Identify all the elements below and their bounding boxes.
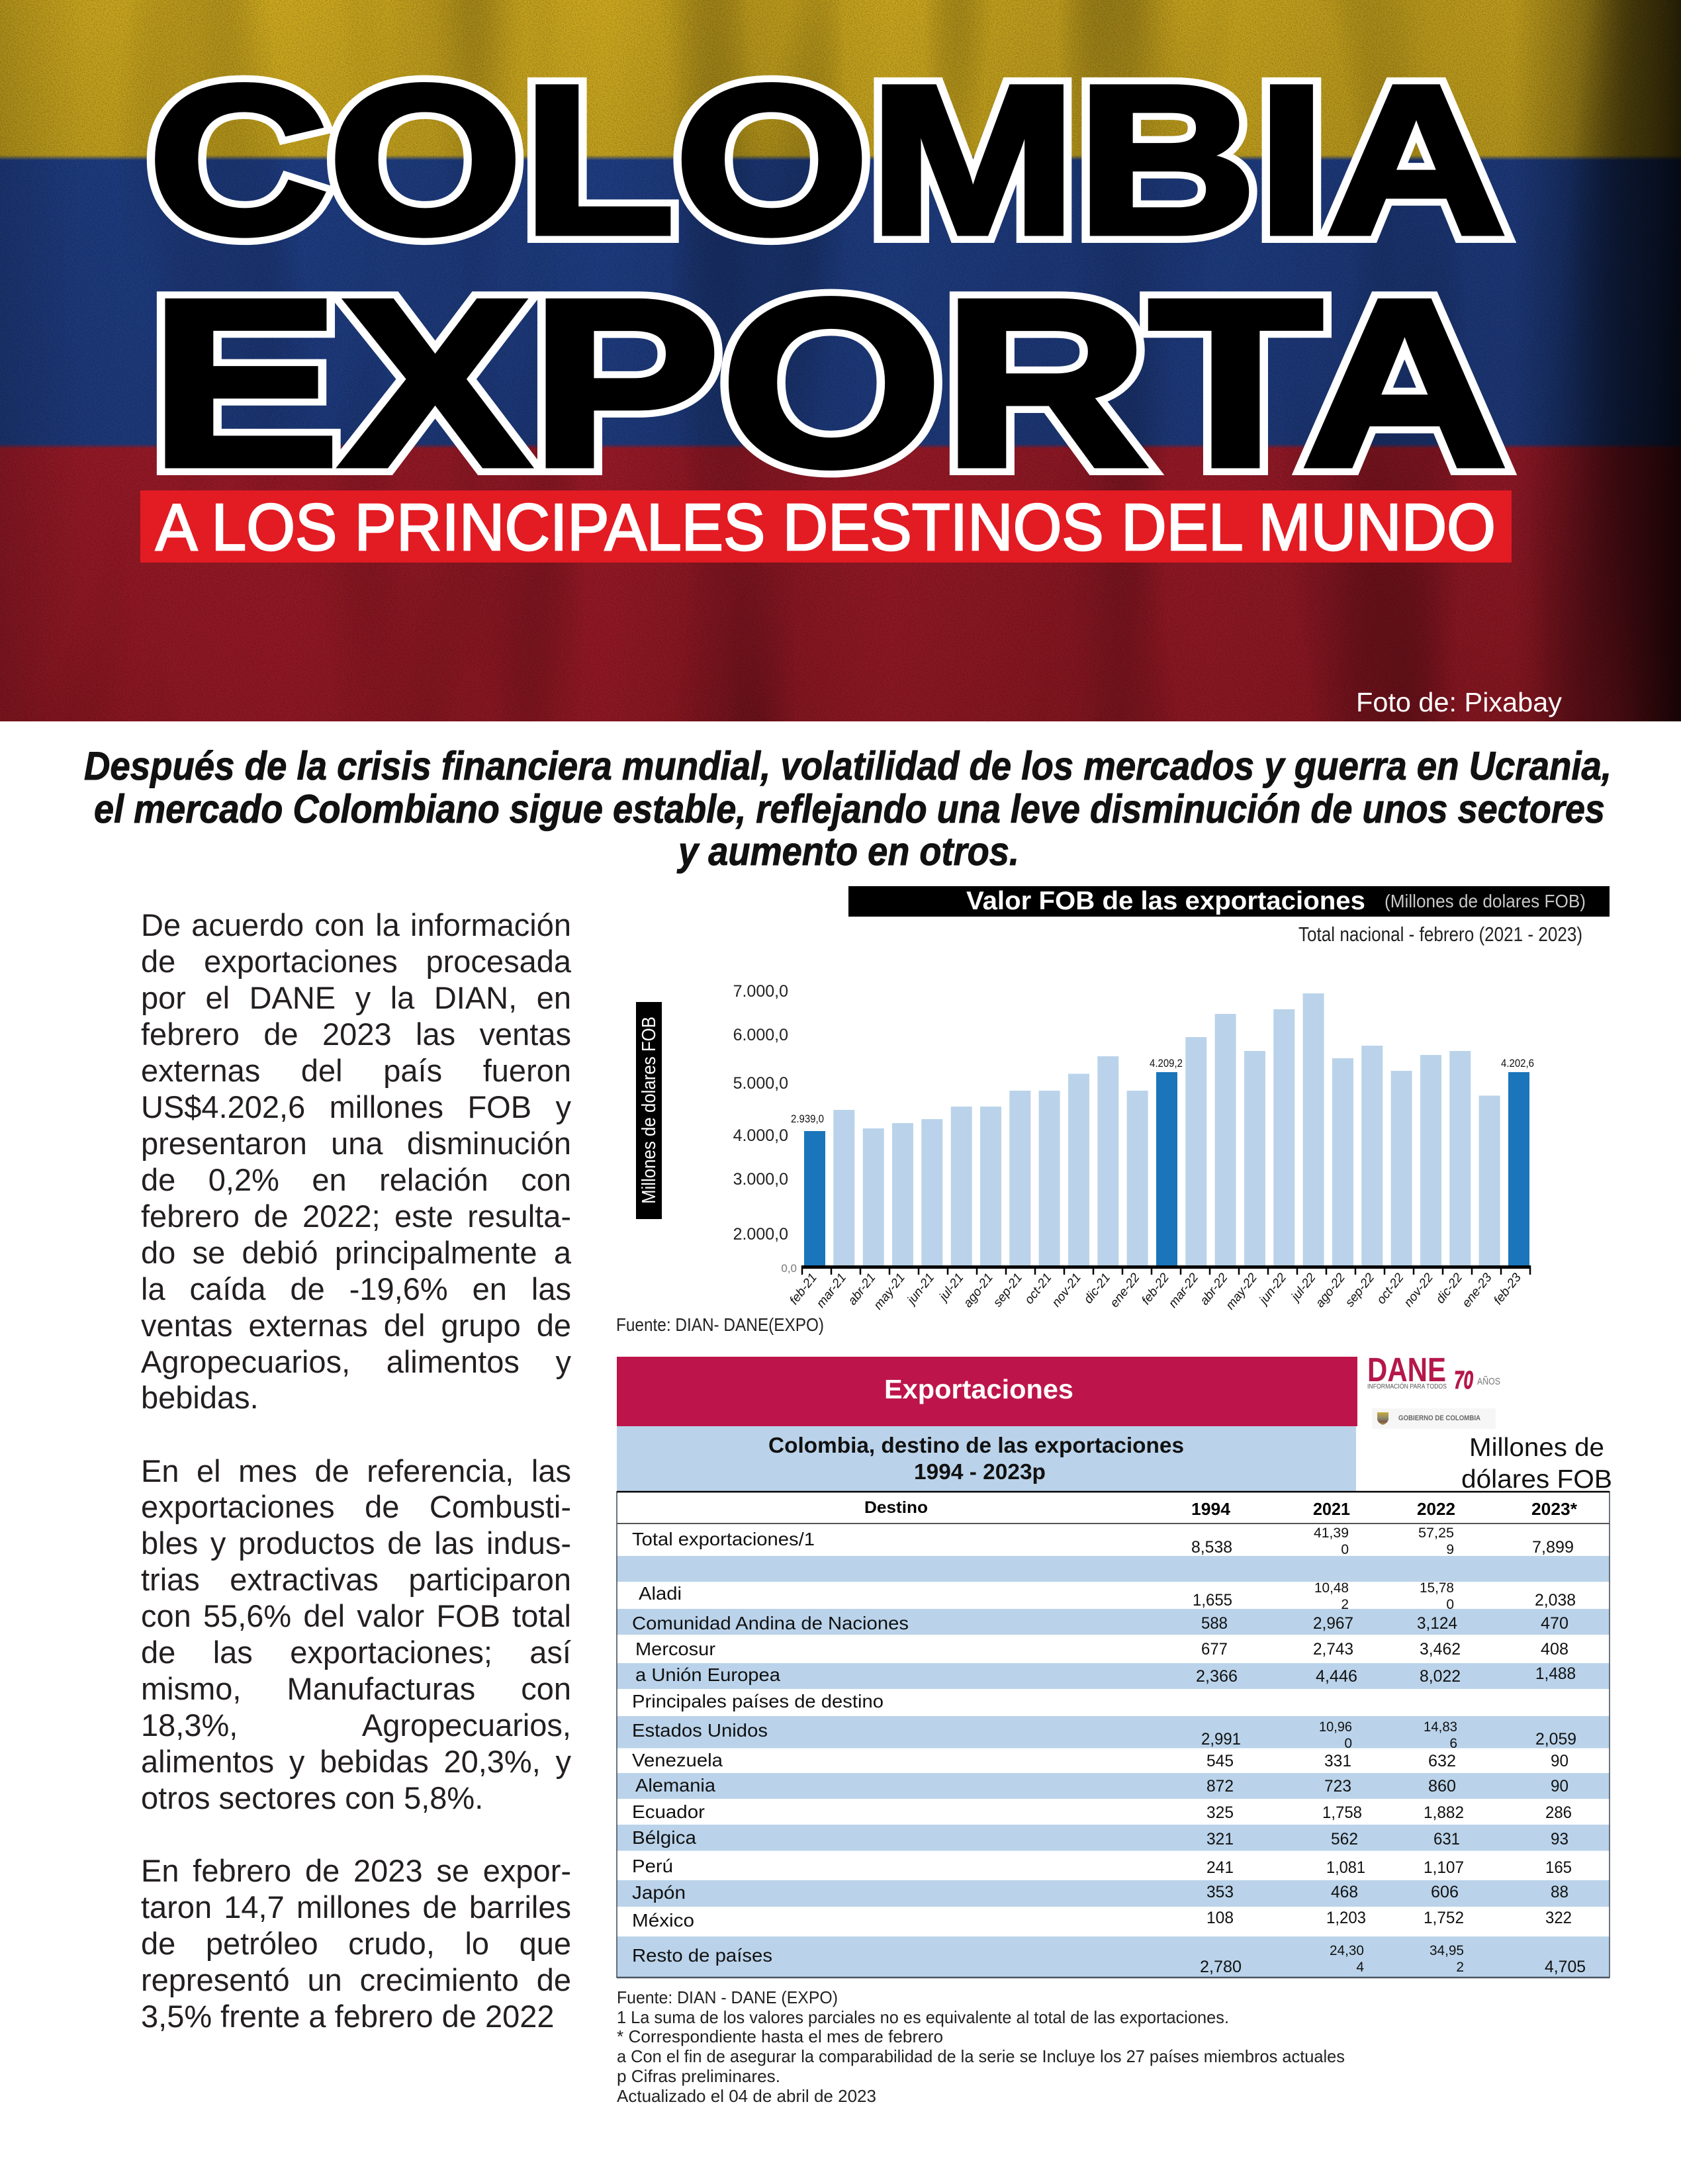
row: Mercosur: 2,743 (1313, 1640, 1353, 1659)
title: COLOMBIA EXPORTA: EXPORTA (150, 250, 1508, 516)
body text: third paragraph: taron 14,7 millones de barriles (141, 1889, 571, 1925)
row: Aladi: 2,038 (1535, 1591, 1576, 1610)
row: Aladi: 1,655 (1193, 1591, 1232, 1610)
hero: Colombian flag background photo (0, 0, 1681, 721)
x axis month labels: sep-22 (1343, 1271, 1377, 1310)
row: Japón: Japón (632, 1882, 686, 1903)
row: Ecuador (632, 1801, 1572, 1822)
table title: destino de las exportaciones: 1994 - 2023p (914, 1459, 1046, 1484)
row: Mercosur (635, 1639, 1568, 1659)
row: Venezuela: 545 (1206, 1752, 1234, 1770)
row: Venezuela (632, 1750, 1568, 1770)
body text: second paragraph (141, 1453, 571, 1815)
row: Aladi: 15,78 (1420, 1580, 1454, 1596)
row: Perú: 165 (1545, 1858, 1572, 1877)
row: Alemania: 872 (1206, 1777, 1234, 1796)
body text: third paragraph: En febrero de 2023 se expor- (141, 1853, 571, 1888)
row: Mercosur: Mercosur (635, 1639, 715, 1659)
row: Total exportaciones: 8,538 (1191, 1538, 1232, 1557)
row: Comunidad Andina de Naciones: 2,967 (1313, 1614, 1353, 1633)
row: Alemania: Alemania (635, 1775, 715, 1796)
logo: Gobierno de Colombia: GOBIERNO DE COLOMBIA (1398, 1414, 1480, 1422)
table units note: dólares FOB (1461, 1465, 1612, 1494)
x axis month labels: may-22 (1223, 1271, 1260, 1312)
table header row: Destino (864, 1498, 928, 1517)
body text: first paragraph: De acuerdo con la información (141, 907, 571, 942)
table header row: 1994 (1191, 1499, 1231, 1519)
data labels: 2.939,0 (791, 1113, 824, 1125)
row: Estados Unidos: 2,059 (1535, 1730, 1576, 1749)
x axis month labels: ago-22 (1313, 1271, 1348, 1310)
y axis labels: 5.000,0 (733, 1074, 788, 1093)
body text: second paragraph: bles y productos de las indus- (141, 1525, 571, 1561)
row: México: 108 (1206, 1909, 1234, 1927)
body text: first paragraph: de exportaciones procesada (141, 944, 571, 979)
body text: second paragraph: trias extractivas participaron (141, 1562, 571, 1597)
row: Aladi: Aladi (639, 1583, 682, 1604)
title: COLOMBIA EXPORTA (148, 41, 1508, 516)
row: Estados Unidos: 0 (1344, 1736, 1352, 1751)
chart source: Fuente: DIAN- DANE(EXPO) (616, 1314, 824, 1335)
row: Resto de países: 2 (1456, 1960, 1464, 1975)
row: Resto de países: 2,780 (1200, 1958, 1242, 1976)
table header row: 2023* (1531, 1499, 1578, 1519)
row: Total exportaciones: 9 (1446, 1542, 1454, 1557)
row: Comunidad Andina de Naciones: Comunidad Andina de Naciones (632, 1613, 909, 1633)
table row stripes (617, 1556, 1610, 1978)
row: Alemania: 90 (1551, 1777, 1568, 1796)
body text: first paragraph: US$4.202,6 millones FOB y (141, 1089, 571, 1124)
body text: second paragraph: mismo, Manufacturas con (141, 1671, 571, 1706)
body text: first paragraph: la caída de -19,6% en las (141, 1271, 571, 1306)
table footnotes: 1 La suma de los valores parciales no es equivalente al total de las exportaciones. (617, 2007, 1229, 2027)
body text: third paragraph: 3,5% frente a febrero de 2022 (141, 1999, 555, 2034)
y axis labels: 6.000,0 (733, 1026, 788, 1044)
row: Resto de países: 34,95 (1430, 1943, 1464, 1958)
row: Comunidad Andina de Naciones (632, 1613, 1568, 1633)
logo: DANE 70 años (1367, 1351, 1500, 1394)
table frame (617, 1492, 1610, 1978)
table footnotes: p Cifras preliminares. (617, 2066, 780, 2086)
x axis month labels: feb-22 (1139, 1271, 1172, 1308)
x axis month labels: ene-22 (1108, 1271, 1143, 1310)
row: Total exportaciones: 7,899 (1532, 1538, 1574, 1557)
body text: third paragraph (141, 1853, 571, 2034)
x axis line and ticks (802, 1265, 1530, 1275)
body text: first paragraph: bebidas. (141, 1380, 259, 1415)
data labels: 4.209,2 (1150, 1057, 1183, 1069)
row: Estados Unidos (632, 1719, 1576, 1751)
row: Mercosur: 677 (1201, 1640, 1228, 1659)
title: COLOMBIA EXPORTA: EXPORTA (150, 250, 1508, 516)
body text: first paragraph: febrero de 2023 las ventas (141, 1017, 571, 1052)
row: Perú: 241 (1206, 1858, 1234, 1877)
table header row (864, 1498, 1578, 1519)
row: Venezuela: Venezuela (632, 1750, 723, 1770)
title: COLOMBIA EXPORTA: COLOMBIA (148, 41, 1506, 278)
y axis title: Millones de dolares FOB (639, 1017, 660, 1204)
x axis month labels: ene-23 (1460, 1271, 1495, 1310)
table title: destino de las exportaciones: Colombia, destino de las exportaciones (768, 1433, 1184, 1457)
logo: DANE 70 años: AÑOS (1477, 1376, 1500, 1387)
row: Mercosur: 3,462 (1420, 1640, 1461, 1659)
row: Aladi: 2 (1341, 1597, 1349, 1612)
chart title bar: (Millones de dolares FOB) (1385, 891, 1586, 911)
body text: second paragraph: alimentos y bebidas 20,3%, y (141, 1744, 571, 1779)
row: Venezuela: 90 (1551, 1752, 1568, 1770)
title: COLOMBIA EXPORTA: COLOMBIA (148, 41, 1506, 278)
x axis month labels: feb-21 (787, 1271, 820, 1308)
x axis month labels: mar-21 (814, 1271, 849, 1310)
table header band: Exportaciones (617, 1357, 1357, 1426)
x axis month labels: abr-22 (1197, 1271, 1231, 1308)
row: Ecuador: 1,758 (1322, 1803, 1362, 1822)
body text: first paragraph: de 0,2% en relación con (141, 1162, 571, 1197)
row: Total exportaciones: 41,39 (1314, 1525, 1349, 1541)
x axis month labels: jul-21 (936, 1271, 967, 1305)
row: Ecuador: 1,882 (1424, 1803, 1464, 1822)
row: Estados Unidos: 10,96 (1319, 1719, 1352, 1735)
row: Total exportaciones (632, 1525, 1574, 1557)
x axis month labels: oct-21 (1022, 1271, 1055, 1307)
data labels: 4.202,6 (1501, 1057, 1534, 1069)
x axis month labels (787, 1271, 1524, 1312)
body text: second paragraph: En el mes de referencia, las (141, 1453, 571, 1488)
row: Total exportaciones: 0 (1341, 1542, 1349, 1557)
row: Perú: Perú (632, 1856, 673, 1876)
y axis labels: 0,0 (781, 1262, 797, 1275)
y axis labels: 4.000,0 (733, 1126, 788, 1145)
table title: destino de las exportaciones (617, 1426, 1356, 1492)
row: Resto de países: Resto de países (632, 1945, 772, 1966)
headline (84, 744, 1612, 874)
body text: first paragraph: do se debió principalmente a (141, 1235, 571, 1270)
row: Japón (632, 1882, 1568, 1903)
headline: y aumento en otros. (676, 829, 1019, 874)
y axis labels: 2.000,0 (733, 1225, 788, 1244)
x axis month labels: nov-21 (1050, 1271, 1084, 1310)
bars (804, 993, 1529, 1265)
x axis month labels: jun-22 (1255, 1271, 1289, 1308)
row: Japón: 468 (1331, 1883, 1358, 1901)
row: México: 1,203 (1326, 1909, 1366, 1927)
row: Ecuador: 325 (1206, 1803, 1234, 1822)
table header row: 2022 (1417, 1499, 1455, 1519)
logo: DANE 70 años: 70 (1454, 1367, 1473, 1394)
row: Ecuador: Ecuador (632, 1801, 705, 1822)
row: Aladi (639, 1580, 1576, 1612)
chart title bar: Valor FOB de las exportaciones (966, 887, 1365, 915)
row: México: 1,752 (1424, 1909, 1464, 1927)
row: Comunidad Andina de Naciones: 588 (1201, 1614, 1228, 1633)
row: Unión Europea: a Unión Europea (635, 1664, 780, 1685)
row: Aladi: 10,48 (1314, 1580, 1349, 1596)
row: Estados Unidos: 14,83 (1424, 1719, 1457, 1735)
row: Japón: 88 (1551, 1883, 1568, 1901)
row: Venezuela: 632 (1428, 1752, 1456, 1770)
body text: first paragraph: Agropecuarios, alimentos y (141, 1344, 571, 1379)
row: Perú: 1,107 (1424, 1858, 1464, 1877)
x axis month labels: sep-21 (991, 1271, 1025, 1310)
row: Unión Europea: 4,446 (1316, 1667, 1357, 1686)
body text: third paragraph: representó un crecimiento de (141, 1962, 571, 1997)
body text: third paragraph: de petróleo crudo, lo que (141, 1926, 571, 1961)
row: Bélgica: 631 (1433, 1830, 1460, 1848)
row: Bélgica: 93 (1551, 1830, 1568, 1848)
body text: second paragraph: otros sectores con 5,8%. (141, 1780, 483, 1815)
row: Aladi: 0 (1446, 1597, 1454, 1612)
subtitle band: A LOS PRINCIPALES DESTINOS DEL MUNDO (156, 490, 1496, 565)
body text: first paragraph: ventas externas del grupo de (141, 1308, 571, 1343)
row: Resto de países: 4 (1356, 1960, 1364, 1975)
x axis month labels: dic-21 (1081, 1271, 1113, 1306)
body text: first paragraph: externas del país fueron (141, 1053, 571, 1088)
x axis month labels: ago-21 (961, 1271, 996, 1310)
photo credit: Foto de: Pixabay (1356, 687, 1562, 717)
body text: first paragraph: febrero de 2022; este resulta- (141, 1199, 571, 1234)
body text: second paragraph: exportaciones de Combusti- (141, 1489, 571, 1524)
x axis month labels: nov-22 (1402, 1271, 1436, 1310)
row: Total exportaciones: 57,25 (1418, 1525, 1454, 1541)
row: Bélgica: Bélgica (632, 1827, 696, 1848)
row: Estados Unidos: 6 (1449, 1736, 1457, 1751)
row: Total exportaciones: Total exportaciones/1 (632, 1529, 815, 1549)
table footnotes: a Con el fin de asegurar la comparabilidad de la serie se Incluye los 27 países miembros actuales (617, 2046, 1345, 2066)
table footnotes: * Correspondiente hasta el mes de febrero (617, 2026, 943, 2046)
table: export destinations (617, 1492, 1610, 1978)
table header band: Exportaciones: Exportaciones (884, 1374, 1073, 1404)
table units note: Millones de (1469, 1433, 1604, 1462)
table units note (1461, 1433, 1612, 1494)
row: Comunidad Andina de Naciones: 3,124 (1417, 1614, 1457, 1633)
y axis labels: 7.000,0 (733, 982, 788, 1001)
row: Unión Europea: 1,488 (1535, 1664, 1576, 1683)
chart title bar (848, 886, 1610, 917)
chart: Valor FOB de las exportaciones (616, 886, 1610, 1335)
row: México: 322 (1545, 1909, 1572, 1927)
row: Alemania: 723 (1324, 1777, 1351, 1796)
row: Perú: 1,081 (1326, 1858, 1365, 1877)
x axis month labels: mar-22 (1166, 1271, 1202, 1310)
x axis month labels: jun-21 (903, 1271, 937, 1308)
body text: first paragraph: por el DANE y la DIAN, en (141, 980, 571, 1015)
row: Alemania: 860 (1428, 1777, 1456, 1796)
row: Venezuela: 331 (1324, 1752, 1351, 1770)
table header row: 2021 (1313, 1499, 1350, 1519)
row: Unión Europea (635, 1664, 1576, 1686)
row: Estados Unidos: Estados Unidos (632, 1720, 768, 1741)
row: México (632, 1909, 1572, 1931)
row: Resto de países: 24,30 (1330, 1943, 1364, 1958)
x axis month labels: abr-21 (845, 1271, 879, 1308)
x axis month labels: oct-22 (1374, 1271, 1407, 1307)
row: Resto de países (632, 1943, 1586, 1976)
body text: first paragraph: presentaron una disminución (141, 1126, 571, 1161)
x axis month labels: jul-22 (1288, 1271, 1319, 1305)
row: Bélgica (632, 1827, 1568, 1848)
logo: Gobierno de Colombia (1372, 1408, 1496, 1429)
row: Principales países de destino: Principales países de destino (632, 1691, 884, 1711)
row: Alemania (635, 1775, 1568, 1796)
data labels (791, 1057, 1534, 1125)
logo: DANE 70 años: INFORMACIÓN PARA TODOS (1367, 1382, 1447, 1390)
x axis month labels: feb-23 (1491, 1271, 1524, 1308)
x axis month labels: may-21 (871, 1271, 908, 1312)
row: Japón: 606 (1431, 1883, 1459, 1901)
row: Comunidad Andina de Naciones: 470 (1541, 1614, 1568, 1633)
row: Perú (632, 1856, 1572, 1877)
body text: second paragraph: con 55,6% del valor FOB total (141, 1598, 571, 1633)
row: Mercosur: 408 (1541, 1640, 1568, 1659)
y axis labels (733, 982, 797, 1275)
row: Ecuador: 286 (1545, 1803, 1572, 1822)
table footnotes (617, 1987, 1345, 2106)
body text: first paragraph (141, 907, 571, 1415)
row: Estados Unidos: 2,991 (1201, 1730, 1241, 1749)
table footnotes: Fuente: DIAN - DANE (EXPO) (617, 1987, 838, 2007)
row: Bélgica: 562 (1331, 1830, 1358, 1848)
row: Japón: 353 (1206, 1883, 1234, 1901)
body text: second paragraph: de las exportaciones; así (141, 1635, 571, 1670)
x axis month labels: dic-22 (1433, 1271, 1466, 1306)
logo: DANE 70 años: DANE (1367, 1351, 1446, 1388)
table footnotes: Actualizado el 04 de abril de 2023 (617, 2086, 876, 2106)
row: Resto de países: 4,705 (1545, 1958, 1586, 1976)
row: Unión Europea: 8,022 (1420, 1667, 1461, 1686)
row: Bélgica: 321 (1206, 1830, 1234, 1848)
body text: second paragraph: 18,3%, Agropecuarios, (141, 1707, 571, 1743)
y axis labels: 3.000,0 (733, 1170, 788, 1189)
row: Unión Europea: 2,366 (1196, 1667, 1238, 1686)
row: México: México (632, 1910, 694, 1931)
chart subtitle: Total nacional - febrero (2021 - 2023) (1298, 923, 1582, 946)
